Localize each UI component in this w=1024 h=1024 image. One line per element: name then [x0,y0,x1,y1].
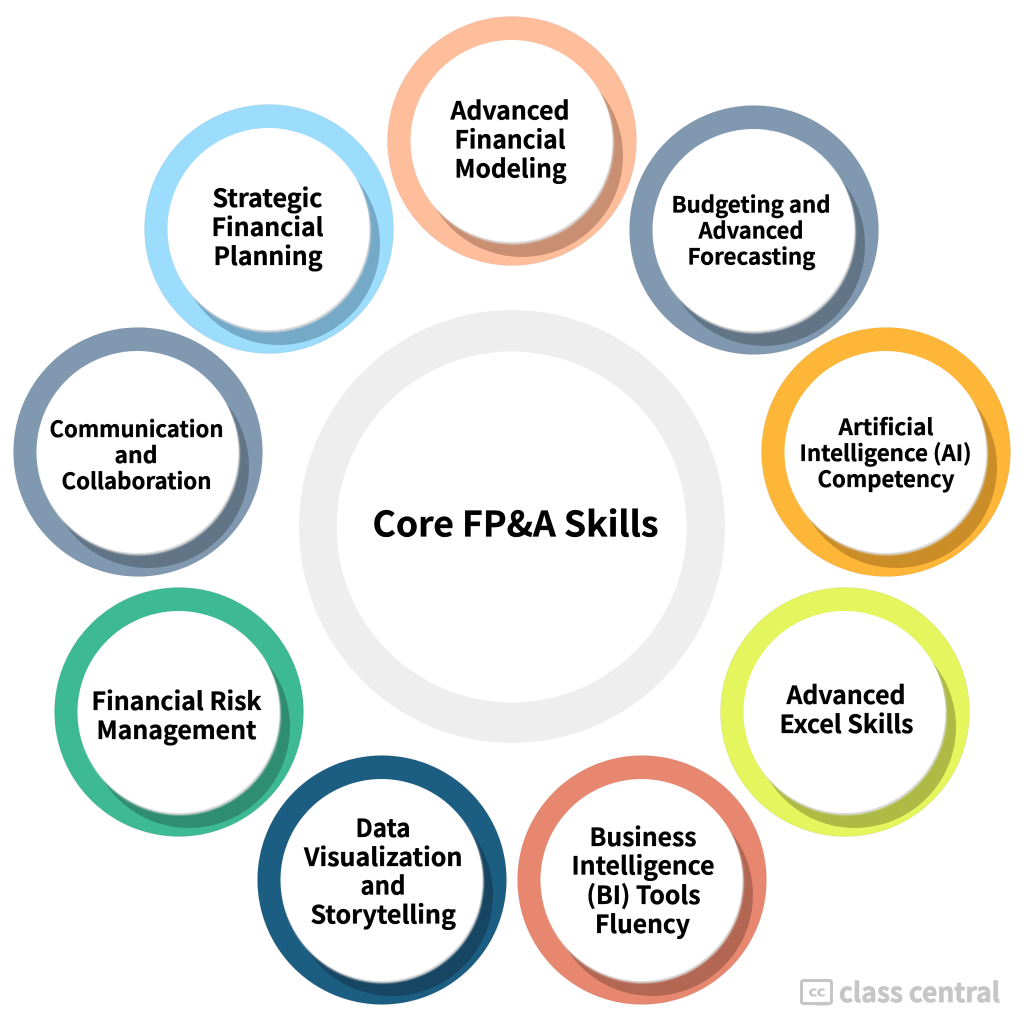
label: Communication [50,412,224,444]
label: Forecasting [688,240,816,272]
label: Excel Skills [780,705,914,741]
label [450,92,570,186]
icon: cc screen: cc [808,982,826,1002]
panel: Financial Risk Management [54,588,304,836]
icon: cc screen [802,980,832,1006]
panel: Budgeting and Advanced Forecasting [630,106,878,354]
panel: Strategic Financial Planning [144,104,394,354]
label: Business [590,818,696,854]
label: and [360,866,406,902]
label [780,676,914,741]
panel: Advanced Financial Modeling [388,16,636,266]
label: Artificial [837,410,934,442]
label: Financial Risk [92,682,262,718]
panel: Advanced Excel Skills [720,588,970,836]
label: and [114,438,158,470]
label: Visualization [303,838,462,874]
label: Management [96,711,257,747]
panel: Communication and Collaboration [14,328,262,576]
label [92,682,262,747]
label: Planning [214,237,323,273]
label [212,179,324,273]
panel: Business Intelligence Tools Fluency [518,756,766,1004]
label: Intelligence [572,846,714,882]
label [50,412,224,496]
label: Financial [212,208,324,244]
label: Advanced [698,214,804,246]
label [572,818,714,941]
label [672,188,830,272]
label: Collaboration [62,464,212,496]
panel: centre ring [299,310,725,743]
label: Competency [818,462,955,494]
logo: class central [802,971,1000,1010]
panel: Data Visualization and Storytelling [258,756,506,1004]
panel: Artificial Intelligence Competency [762,328,1010,576]
label: Financial [454,120,566,156]
label: Data [356,809,410,845]
wordmark: class central [839,971,1000,1010]
title: Core FP&A Skills [372,497,658,548]
label: Intelligence (AI) [800,436,972,468]
label: Strategic [212,179,322,215]
label [303,809,462,932]
label: (BI) Tools [586,876,700,912]
label: Storytelling [310,896,456,932]
label [800,410,972,494]
label: Modeling [454,150,567,186]
label: Advanced [450,92,570,128]
label: Advanced [786,676,906,712]
label: Fluency [595,905,691,941]
label: Budgeting and [672,188,830,220]
